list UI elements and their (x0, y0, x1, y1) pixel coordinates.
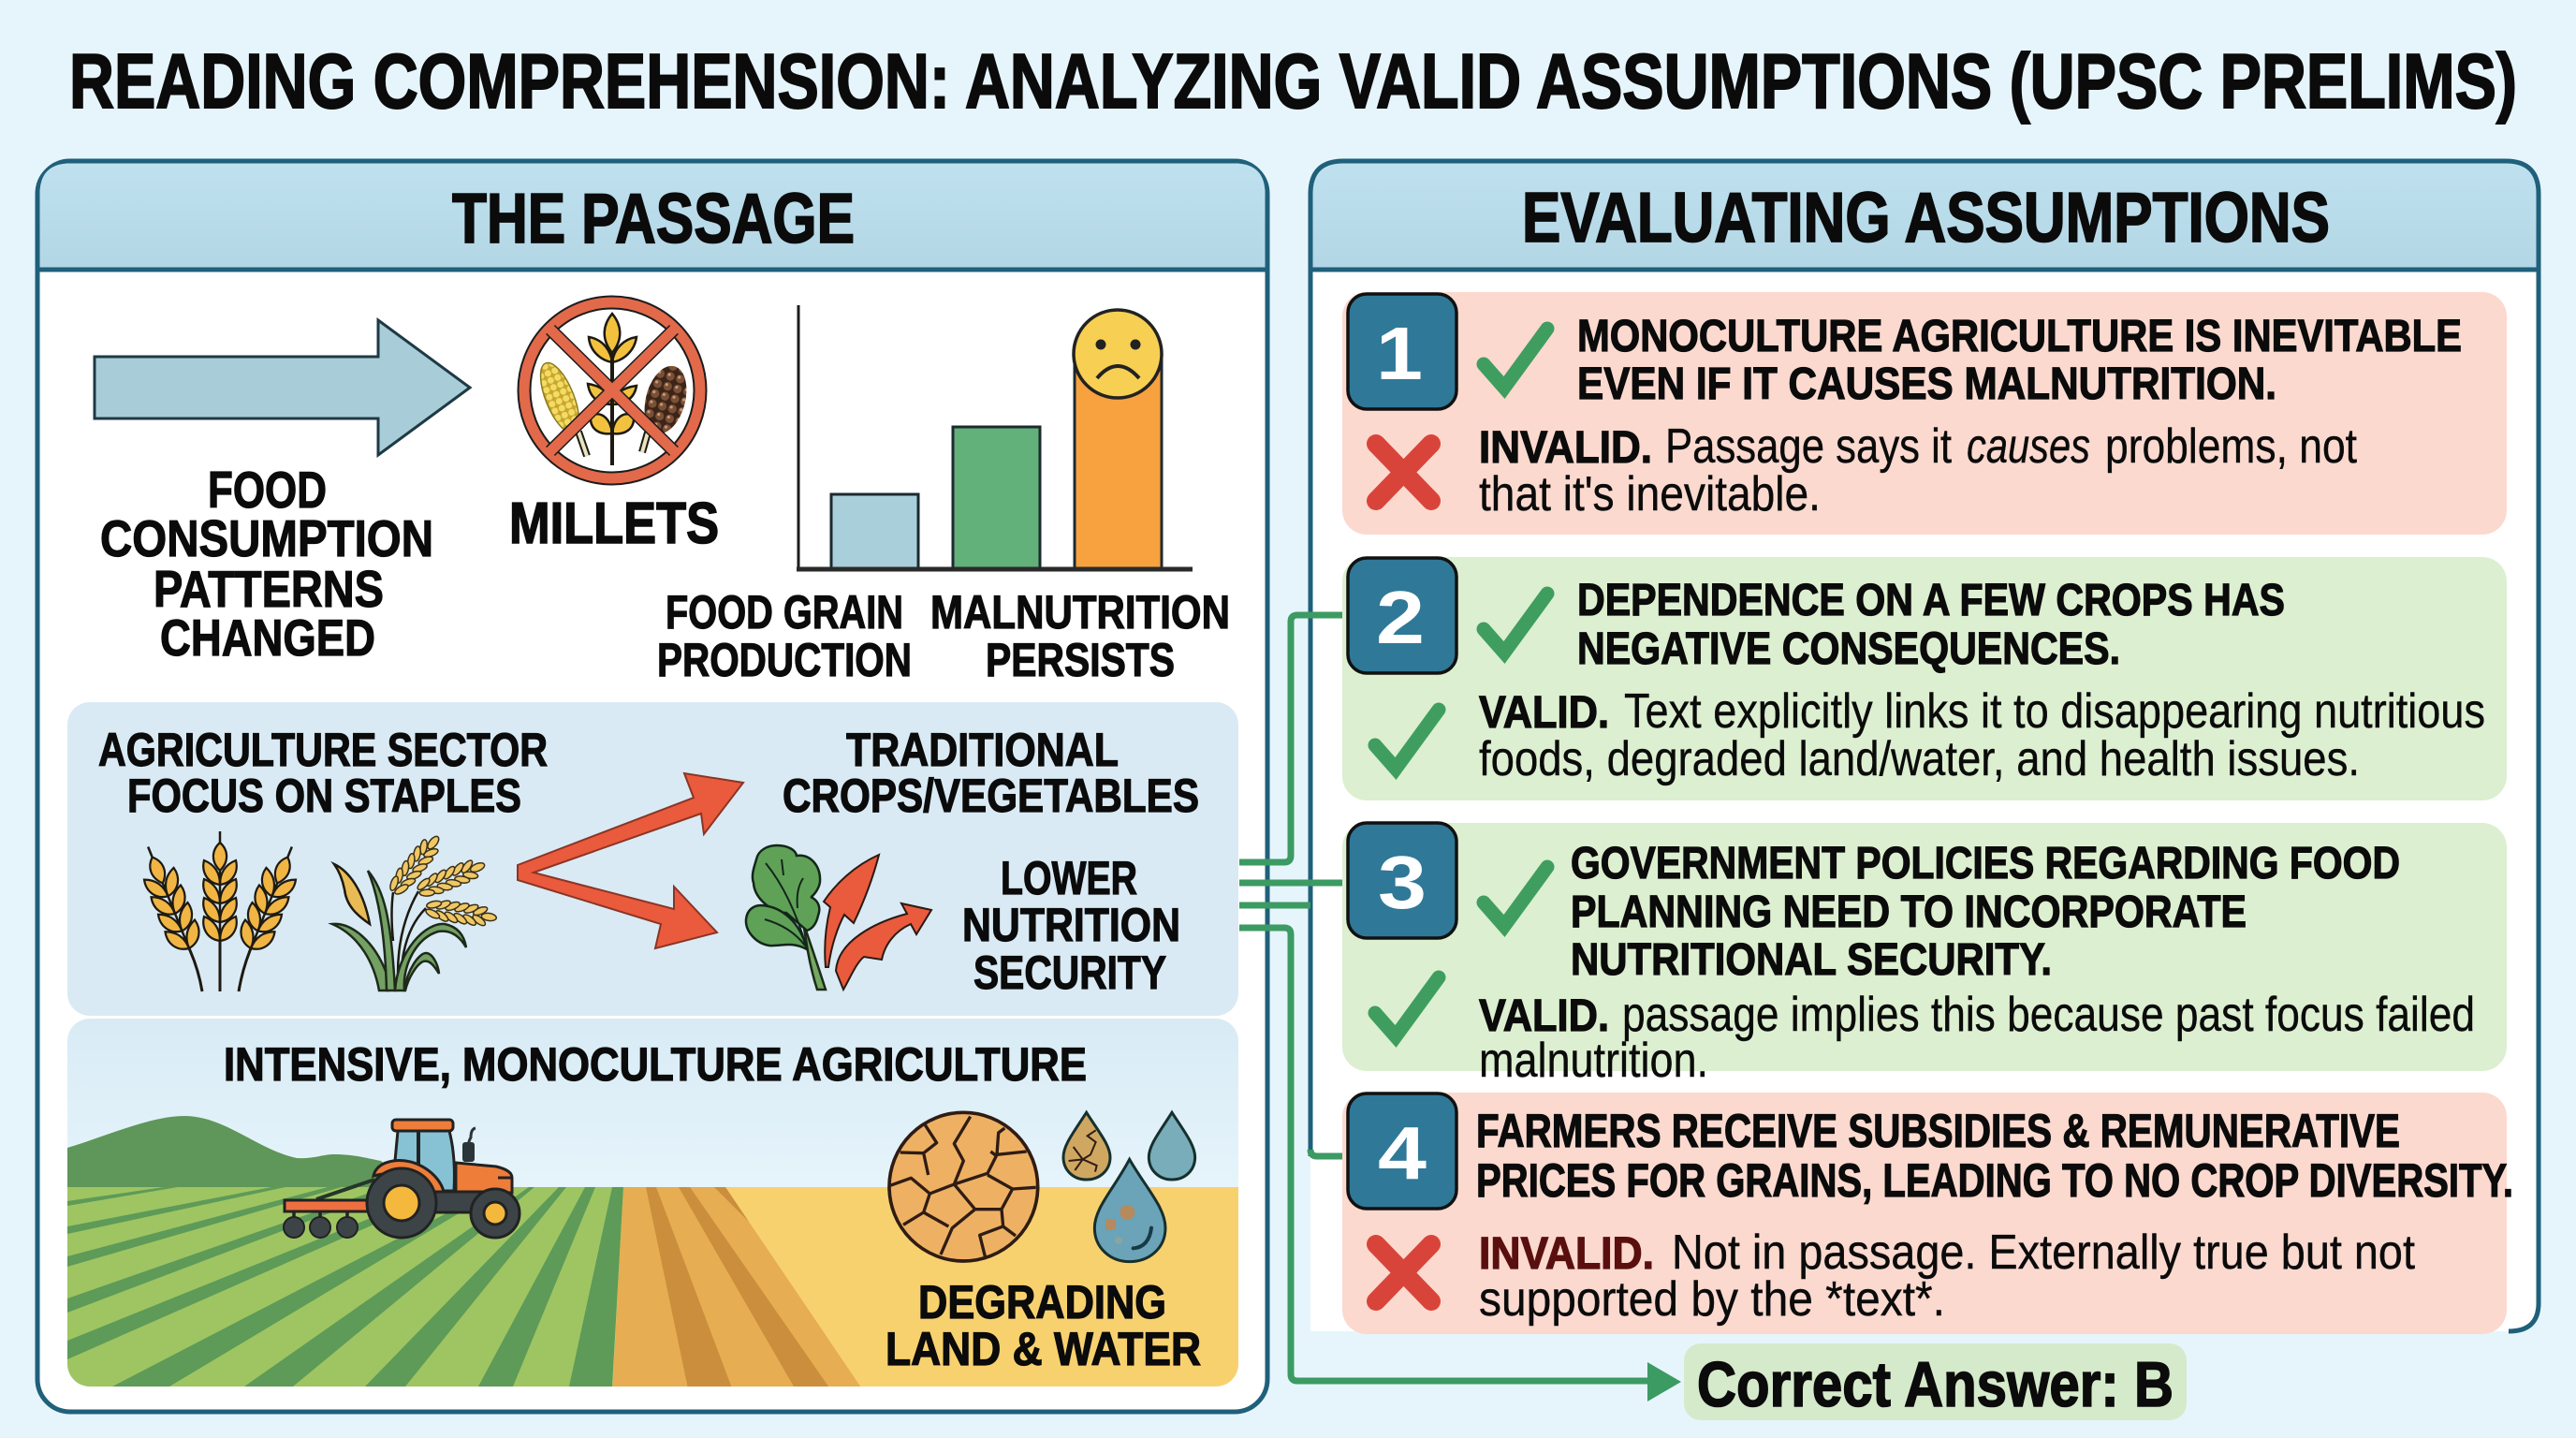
verdict text: that it's inevitable. (1479, 467, 1821, 521)
text: lower nutrition security: LOWER (1001, 852, 1137, 904)
statement: DEPENDENCE ON A FEW CROPS HAS (1577, 576, 2285, 625)
number badge 3: 3 (1378, 841, 1427, 924)
icon: cross (1376, 444, 1431, 501)
number badge 1: 1 (1376, 312, 1423, 395)
text: lower nutrition security: SECURITY (973, 946, 1166, 999)
panel: evaluating assumptions (1310, 161, 2539, 1331)
bar: orange (1075, 354, 1162, 569)
icon: check (1375, 710, 1439, 769)
statement: EVEN IF IT CAUSES MALNUTRITION. (1577, 360, 2276, 409)
verdict text (1479, 1225, 2415, 1327)
text: lower nutrition security: NUTRITION (962, 899, 1180, 951)
verdict text (1479, 419, 2357, 521)
text: food consumption patterns changed: PATTERNS (154, 560, 384, 618)
verdict text: supported by the *text*. (1479, 1272, 1945, 1327)
panel body (1310, 161, 2539, 1331)
chart labels: MALNUTRITION (930, 586, 1230, 638)
icon: wheat (133, 831, 307, 991)
verdict text (1479, 684, 2485, 786)
panel body (37, 161, 1267, 1412)
heading: evaluating assumptions: EVALUATING ASSUMPTIONS (1522, 178, 2330, 257)
number badge 4: 4 (1378, 1111, 1427, 1195)
text: agriculture sector focus on staples (98, 724, 548, 822)
number badge 3 (1348, 823, 1456, 938)
panel header band (39, 163, 1266, 270)
icon: check (1484, 594, 1547, 653)
arrows: curved red nutrition arrows (824, 855, 931, 990)
statement: PLANNING NEED TO INCORPORATE (1571, 888, 2247, 937)
number badge 2: 2 (1376, 576, 1425, 659)
statement (1577, 312, 2462, 409)
verdict text: INVALID. (1479, 423, 1652, 473)
panel: intensive monoculture agriculture (67, 1019, 1245, 1393)
icon: polluted water drop (1094, 1159, 1165, 1262)
number badge 2 (1348, 558, 1456, 673)
text: degrading land and water (886, 1276, 1201, 1375)
text: traditional crops: CROPS/VEGETABLES (783, 770, 1199, 822)
icon: check (1484, 867, 1547, 926)
landscape: hill and fields (67, 1116, 1245, 1393)
icon: tractor (284, 1120, 520, 1238)
prohibition sign (524, 302, 700, 478)
heading: intensive monoculture agriculture: INTENSIVE, MONOCULTURE AGRICULTURE (224, 1038, 1087, 1091)
icon: cracked earth (889, 1112, 1038, 1261)
text: traditional crops: TRADITIONAL (846, 724, 1119, 776)
heading: the passage: THE PASSAGE (452, 179, 855, 257)
number badge 4 (1348, 1093, 1456, 1209)
text: traditional crops (783, 724, 1199, 822)
icon: crossed-out millets (524, 302, 700, 478)
chart labels (657, 586, 1230, 686)
statement: MONOCULTURE AGRICULTURE IS INEVITABLE (1577, 312, 2462, 361)
verdict text (1479, 988, 2475, 1088)
icon: cracked water drop (1063, 1112, 1110, 1180)
statement (1577, 576, 2285, 674)
verdict text: Not in passage. Externally true but not (1672, 1225, 2415, 1280)
bar chart: production vs malnutrition (797, 305, 1193, 569)
statement (1571, 839, 2400, 985)
text: degrading land and water: DEGRADING (918, 1276, 1166, 1328)
arrow: to correct answer (1647, 1362, 1681, 1401)
statement: NEGATIVE CONSEQUENCES. (1577, 624, 2120, 674)
panel header band (1310, 161, 2539, 270)
connector lines (1239, 615, 1652, 1381)
text: lower nutrition security (962, 852, 1180, 999)
chart labels: PERSISTS (986, 634, 1175, 686)
verdict text: VALID. (1479, 991, 1609, 1041)
icon: sad face (1074, 310, 1162, 398)
text: food consumption patterns changed (100, 461, 433, 667)
text: agriculture sector focus on staples: FOCUS ON STAPLES (127, 770, 521, 822)
icon: rice plant (332, 829, 498, 990)
panel: the passage (37, 161, 1267, 1412)
verdict text: problems, not (2105, 419, 2357, 474)
panel: agriculture sector (67, 702, 1238, 1016)
chart labels: PRODUCTION (657, 634, 912, 686)
verdict text: foods, degraded land/water, and health issues. (1479, 732, 2360, 786)
statement: NUTRITIONAL SECURITY. (1571, 935, 2052, 985)
corn and sorghum (578, 432, 587, 456)
card 1: monoculture (1342, 292, 2507, 535)
callout: correct answer: Correct Answer: B (1697, 1349, 2174, 1420)
bar: light blue (831, 494, 918, 569)
icon: check (1375, 977, 1439, 1036)
card 2: few crops (1342, 557, 2507, 800)
arrow: food consumption shift (95, 320, 470, 455)
statement (1476, 1105, 2513, 1207)
verdict text: Passage says it (1665, 419, 1952, 474)
verdict text: INVALID. (1479, 1229, 1654, 1279)
verdict text: causes (1967, 419, 2090, 474)
icon: check (1484, 329, 1547, 388)
icon: cross (1376, 1244, 1431, 1301)
card 4: subsidies (1342, 1093, 2513, 1334)
label: millets: MILLETS (509, 492, 719, 556)
verdict text: malnutrition. (1479, 1034, 1708, 1088)
bar: green (953, 427, 1040, 569)
number badge 1 (1348, 294, 1456, 409)
text: food consumption patterns changed: FOOD (208, 461, 327, 519)
icon: small water drop (1149, 1112, 1195, 1180)
text: degrading land and water: LAND & WATER (886, 1323, 1201, 1375)
text: food consumption patterns changed: CONSUMPTION (100, 509, 433, 567)
center grain (588, 314, 637, 465)
chart labels: FOOD GRAIN (666, 586, 903, 638)
arrows: diverging red arrows (518, 773, 743, 948)
card 3: government policies (1342, 823, 2507, 1088)
verdict text: VALID. (1479, 688, 1609, 738)
text: food consumption patterns changed: CHANGED (160, 609, 375, 667)
text: agriculture sector focus on staples: AGRICULTURE SECTOR (98, 724, 548, 776)
icon: leafy vegetable (746, 845, 826, 990)
statement: GOVERNMENT POLICIES REGARDING FOOD (1571, 839, 2400, 888)
